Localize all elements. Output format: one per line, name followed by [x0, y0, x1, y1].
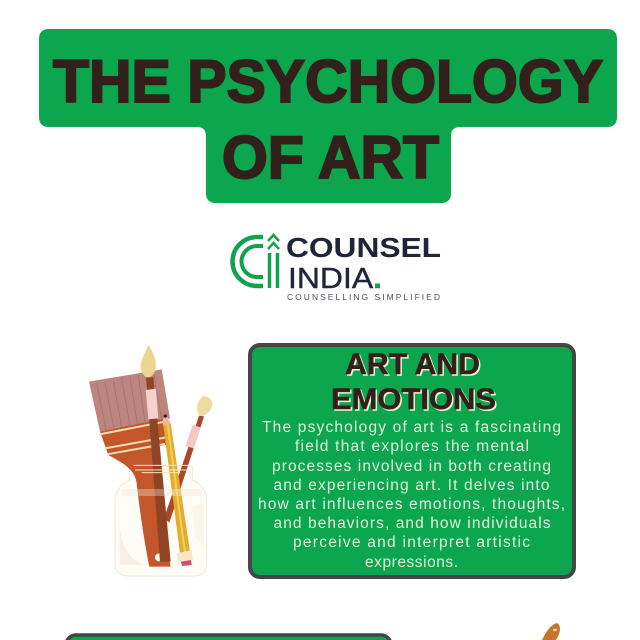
panel body text: expressions.	[365, 554, 458, 571]
panel heading shadow: ART AND	[346, 350, 482, 382]
panel: art and emotions	[250, 345, 574, 577]
panel body text: perceive and interpret artistic	[293, 534, 530, 551]
title banner	[39, 29, 617, 203]
panel heading	[331, 348, 496, 416]
panel body text	[258, 419, 565, 571]
panel body text: field that explores the mental	[295, 438, 529, 455]
logo mark	[232, 235, 279, 288]
panel body text: and experiencing art. It delves into	[274, 477, 550, 494]
panel body text: how art influences emotions, thoughts,	[258, 496, 565, 513]
panel heading shadow	[332, 350, 498, 418]
flat brush	[89, 369, 171, 567]
second brush	[141, 345, 171, 562]
title text: OF ART	[222, 124, 439, 191]
pencil	[163, 414, 193, 566]
panel body text: processes involved in both creating	[272, 458, 551, 475]
logo: Counsel India: INDIA .	[288, 263, 382, 295]
logo tagline: COUNSELLING SIMPLIFIED	[287, 292, 440, 302]
third brush	[164, 395, 212, 523]
illustration: brushes and pencil in a jar	[89, 345, 212, 576]
panel body text: The psychology of art is a fascinating	[262, 419, 561, 436]
panel heading: ART AND	[345, 348, 480, 381]
panel body text: and behaviors, and how individuals	[274, 515, 551, 532]
title text	[53, 48, 603, 191]
panel heading shadow: EMOTIONS	[332, 384, 498, 418]
panel heading: EMOTIONS	[331, 383, 496, 416]
icon: brush tip (cropped)	[542, 623, 560, 640]
logo: Counsel India	[232, 232, 441, 302]
jar back	[115, 467, 207, 576]
logo wordmark: COUNSEL	[286, 232, 441, 263]
title text: THE PSYCHOLOGY	[53, 48, 603, 115]
jar highlights	[133, 465, 188, 473]
panel: next section (cropped)	[66, 635, 391, 640]
